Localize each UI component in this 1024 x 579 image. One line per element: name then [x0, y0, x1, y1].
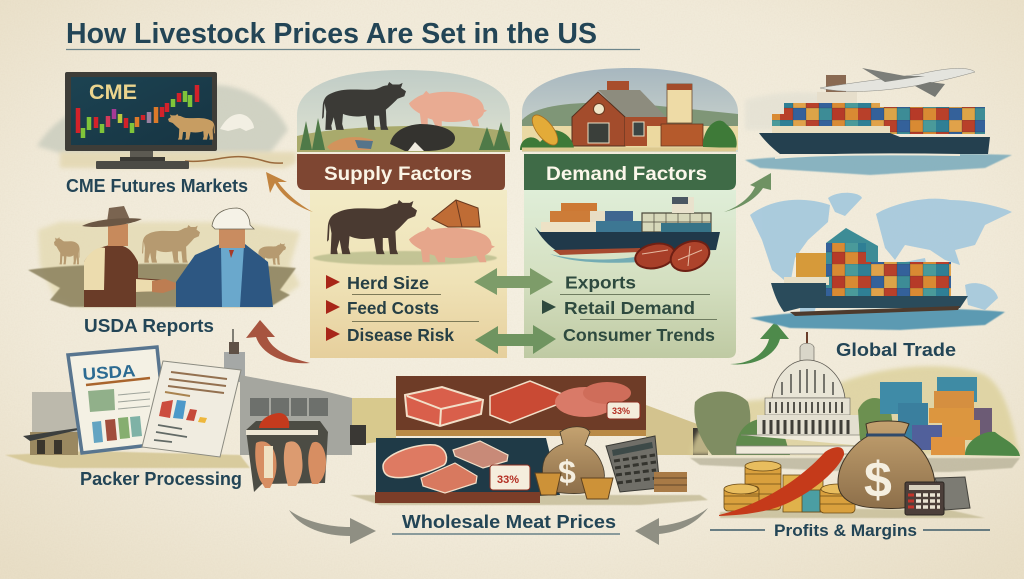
banner: Demand Factors: Demand Factors [546, 164, 707, 185]
panel: global trade [750, 193, 1012, 360]
icon: white animal silhouette [220, 114, 254, 131]
icon: corn [528, 111, 562, 149]
icon: feed crate [432, 200, 480, 227]
bullet: Consumer Trends: Consumer Trends [563, 325, 715, 345]
icon: bar chart sheet [142, 361, 241, 457]
banner: Demand Factors [524, 154, 736, 190]
tag: percentage: 33% [497, 474, 519, 486]
panel: shipping plane and container ship [745, 68, 1012, 175]
panel: demand factors [520, 68, 738, 358]
icon: hanging carcasses rack [246, 413, 328, 492]
label: Profits & Margins: Profits & Margins [774, 521, 917, 540]
icon: cow [327, 200, 417, 254]
icon: coin stacks [724, 461, 855, 513]
shelf: upper meat display [396, 376, 646, 436]
label: USDA Reports: USDA Reports [84, 316, 214, 336]
arrow: supply to CME [266, 172, 313, 212]
label: CME Futures Markets: CME Futures Markets [66, 176, 248, 196]
banner: Supply Factors [297, 154, 505, 190]
arrow: supply to USDA [246, 320, 310, 363]
bullet: Exports: Exports [565, 272, 636, 292]
arrow: demand to global trade [730, 322, 789, 364]
arrow: demand to ship [724, 173, 771, 212]
panel: supply factors [297, 70, 510, 358]
icon: money sack [542, 427, 604, 494]
tag: percentage [490, 465, 530, 490]
icon: calculators [905, 477, 970, 515]
icon: farmer [82, 206, 165, 307]
arrow: two-way supply demand upper [474, 268, 553, 295]
panel: USDA reports handshake [28, 206, 300, 336]
bullet: Feed Costs: Feed Costs [347, 298, 439, 318]
tag: percentage: 33% [612, 406, 630, 416]
bullet: Disease Risk: Disease Risk [347, 325, 454, 345]
bullet: Retail Demand: Retail Demand [564, 298, 695, 318]
icon: calculator [606, 436, 687, 492]
label: Global Trade: Global Trade [836, 340, 956, 360]
label: Wholesale Meat Prices: Wholesale Meat Prices [402, 512, 616, 532]
tag: percentage [607, 402, 640, 419]
label: Packer Processing: Packer Processing [80, 469, 242, 489]
icon: small hut [23, 428, 78, 455]
icon: USDA report sheet [68, 347, 167, 453]
icon: background cattle silhouettes [54, 225, 286, 265]
icon: red rising arrow [719, 447, 844, 516]
icon: capitol building [736, 332, 870, 454]
icon: tan cow [168, 114, 215, 140]
icon: barn roof right [646, 405, 708, 455]
icon: USDA report sheet: USDA [82, 361, 136, 384]
arrow: two-way supply demand lower [475, 325, 556, 354]
icon: tree left [694, 392, 750, 455]
icon: money bag [838, 421, 935, 508]
icon: cargo ship with steaks [535, 197, 720, 276]
icon: money sack: $ [558, 454, 576, 490]
shelf: lower meat display [375, 438, 560, 503]
icon: airplane [820, 68, 975, 97]
panel: capitol and profits [690, 332, 1020, 540]
arrow: profits to wholesale [635, 508, 708, 545]
panel: wholesale meat prices [350, 376, 708, 534]
icon: pig [409, 227, 495, 262]
bullet: Herd Size: Herd Size [347, 273, 429, 293]
icon: stacked container ship [750, 228, 1005, 330]
icon: stacked containers [880, 377, 1020, 456]
title: How Livestock Prices Are Set in the US [66, 18, 597, 50]
card: supply list [310, 190, 507, 358]
arrow: packer to wholesale [289, 510, 376, 544]
banner: Supply Factors: Supply Factors [324, 164, 472, 185]
icon: container ship [745, 75, 1012, 175]
icon: tree right [858, 398, 895, 440]
icon: world map [750, 193, 1012, 322]
card: demand list [524, 190, 736, 358]
panel: CME futures markets [37, 72, 296, 196]
icon: engineer in hard hat [176, 208, 273, 307]
icon: handshake [152, 279, 176, 293]
icon: monitor with candlestick chart: CME [89, 81, 137, 104]
scene: supply animals dome [297, 70, 510, 152]
panel: packer processing [5, 329, 396, 492]
icon: monitor with candlestick chart [65, 72, 217, 169]
scene: farm dome [520, 68, 738, 152]
icon: money bag: $ [864, 452, 892, 508]
icon: packing plant building [224, 329, 396, 455]
icon: bowls [535, 473, 613, 499]
icon: barn [572, 81, 703, 146]
